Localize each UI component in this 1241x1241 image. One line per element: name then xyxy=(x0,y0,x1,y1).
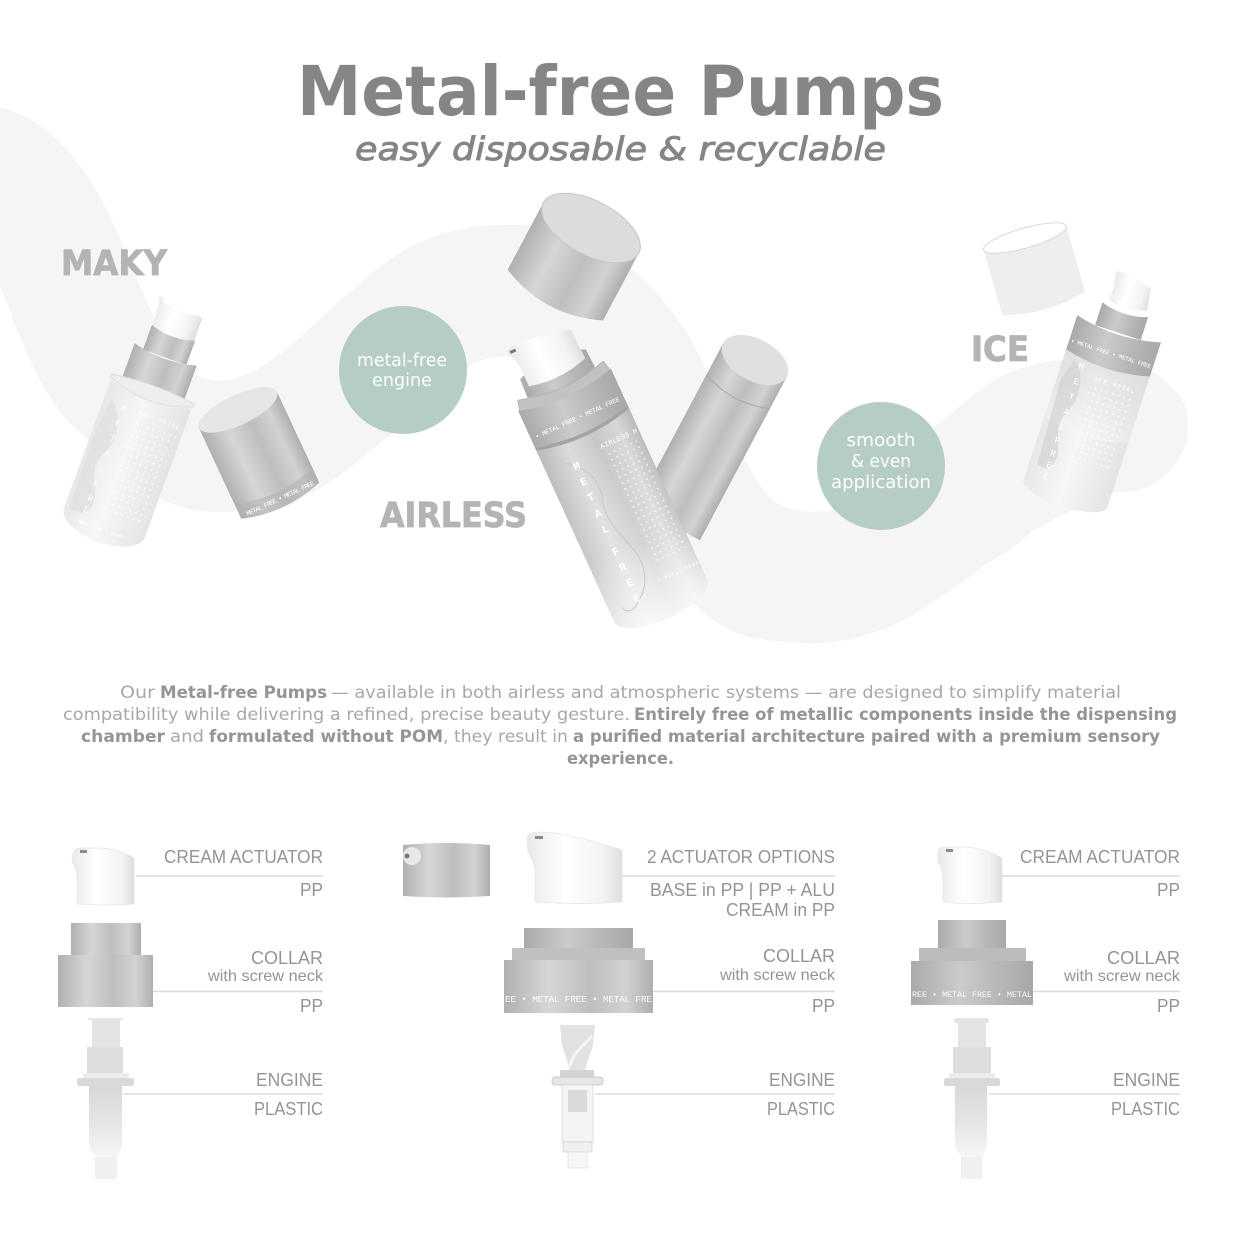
MAKY bottle: METALFREE xyxy=(78,404,128,528)
ICE bottle: METALFREE xyxy=(1041,361,1086,483)
description paragraph: , they result in xyxy=(443,727,568,747)
description paragraph: experience. xyxy=(567,749,674,768)
ICE bottle: • METAL FREE • METAL FREE xyxy=(1070,338,1152,370)
description paragraph: chamber xyxy=(81,727,166,746)
description paragraph: a purified material architecture paired with a premium sensory xyxy=(573,727,1160,746)
description paragraph: formulated without POM xyxy=(209,727,443,746)
MAKY engine xyxy=(77,1018,134,1179)
MAKY cap: METAL FREE • METAL FREE xyxy=(246,480,316,518)
ICE engine xyxy=(944,1018,1000,1179)
product label: AIRLESS: AIRLESS xyxy=(380,496,527,536)
labels: AIRLESS: 2 ACTUATOR OPTIONS xyxy=(647,846,835,867)
labels: AIRLESS: CREAM in PP xyxy=(726,899,835,920)
labels: ICE: PLASTIC xyxy=(1111,1098,1180,1119)
labels: AIRLESS: BASE in PP | PP + ALU xyxy=(650,879,835,900)
MAKY actuator xyxy=(72,848,134,905)
labels: ICE: ENGINE xyxy=(1113,1069,1180,1090)
AIRLESS collar xyxy=(504,928,653,1013)
background wave xyxy=(0,108,1187,643)
subtitle: easy disposable & recyclable xyxy=(355,130,886,168)
labels: ICE: with screw neck xyxy=(1063,968,1181,985)
callout: metal-free engine: engine xyxy=(372,371,432,391)
callout: smooth and even application: application xyxy=(831,473,931,493)
ICE cap xyxy=(981,217,1087,321)
AIRLESS bottle: • Metal-Free xyxy=(657,560,700,584)
AIRLESS bottle: AIRLESS M xyxy=(599,428,639,452)
description paragraph xyxy=(63,683,1177,768)
labels: ICE: CREAM ACTUATOR xyxy=(1020,846,1180,867)
AIRLESS white actuator xyxy=(527,832,622,904)
ICE actuator xyxy=(938,847,1002,904)
labels: MAKY: with screw neck xyxy=(207,968,324,985)
AIRLESS bottle xyxy=(493,313,715,639)
labels: MAKY: ENGINE xyxy=(256,1069,323,1090)
labels: MAKY: PLASTIC xyxy=(254,1098,323,1119)
AIRLESS engine xyxy=(552,1025,603,1168)
description paragraph: Entirely free of metallic components inside the dispensing xyxy=(634,705,1177,724)
ICE bottle xyxy=(1019,263,1178,521)
AIRLESS bottle: • METAL FREE • METAL FREE xyxy=(534,396,621,441)
labels: MAKY: COLLAR xyxy=(251,947,323,968)
labels: AIRLESS: ENGINE xyxy=(769,1069,835,1090)
labels: ICE: PP xyxy=(1157,879,1180,900)
callout: metal-free engine: metal-free xyxy=(357,351,447,371)
MAKY cap xyxy=(193,378,322,525)
ICE collar: REE • METAL FREE • METAL xyxy=(912,990,1032,1000)
product label: ICE: ICE xyxy=(971,330,1029,370)
callout: smooth and even application: smooth xyxy=(846,431,916,451)
description paragraph: — available in both airless and atmospheric systems — are designed to simplify material xyxy=(331,683,1121,703)
AIRLESS collar: EE • METAL FREE • METAL FRE xyxy=(505,994,652,1005)
labels: AIRLESS: PLASTIC xyxy=(767,1098,835,1119)
labels: MAKY: PP xyxy=(300,995,323,1016)
description paragraph: compatibility while delivering a refined, precise beauty gesture. xyxy=(63,705,630,725)
MAKY bottle xyxy=(56,289,225,557)
MAKY bottle: • Metal-Free • Smooth xyxy=(73,517,125,541)
component stack: AIRLESS xyxy=(403,832,653,1168)
title: Metal-free Pumps xyxy=(297,52,944,132)
labels: AIRLESS: PP xyxy=(812,995,835,1016)
labels: ICE xyxy=(989,846,1181,1119)
callout: smooth and even application: & even xyxy=(851,452,911,472)
MAKY collar xyxy=(58,923,153,1007)
callout: metal-free engine xyxy=(339,306,467,434)
component stack: MAKY xyxy=(58,848,153,1179)
description paragraph: and xyxy=(170,727,204,747)
AIRLESS cap xyxy=(502,179,651,331)
labels: MAKY xyxy=(123,846,324,1119)
callout: smooth and even application xyxy=(817,402,945,530)
description paragraph: Metal-free Pumps xyxy=(160,683,327,702)
description paragraph: Our xyxy=(120,683,155,703)
labels: AIRLESS xyxy=(595,846,836,1119)
component stack: ICE xyxy=(911,847,1033,1179)
AIRLESS bottle: METALFREE xyxy=(572,461,643,606)
labels: ICE: COLLAR xyxy=(1107,947,1180,968)
AIRLESS back tube xyxy=(636,325,797,540)
ICE bottle: ICE METAL xyxy=(1093,376,1135,395)
labels: AIRLESS: COLLAR xyxy=(763,945,835,966)
MAKY bottle: MAKY METAL xyxy=(137,410,181,431)
AIRLESS metal base actuator xyxy=(403,843,490,898)
product label: MAKY: MAKY xyxy=(61,244,168,284)
ICE collar xyxy=(911,920,1033,1005)
labels: ICE: PP xyxy=(1157,995,1180,1016)
labels: MAKY: CREAM ACTUATOR xyxy=(164,846,323,867)
labels: MAKY: PP xyxy=(300,879,323,900)
labels: AIRLESS: with screw neck xyxy=(719,967,836,984)
